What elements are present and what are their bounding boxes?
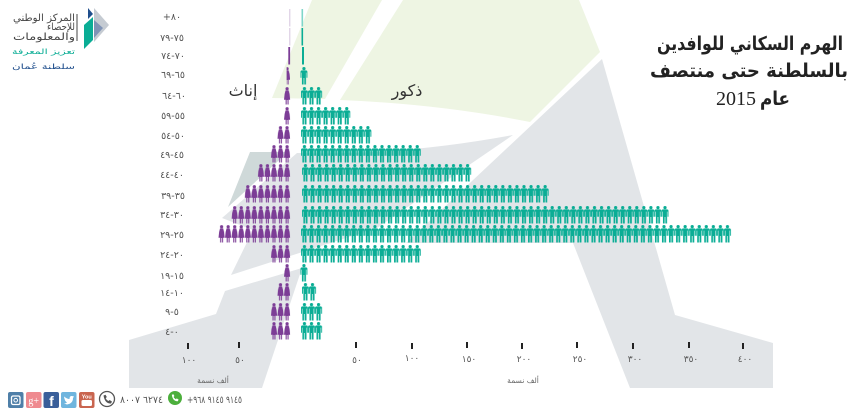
age labels: ٦٥-٦٩ bbox=[161, 70, 185, 81]
age labels: ٤٥-٤٩ bbox=[160, 150, 184, 161]
axis labels: ٥٠ bbox=[235, 356, 245, 366]
axis labels: ٤٠٠ bbox=[738, 355, 752, 365]
age labels: ٠-٤ bbox=[165, 327, 179, 338]
logo tagline: تعزيز المعرفة bbox=[12, 47, 75, 56]
unit label: females: ألف نسمة bbox=[197, 375, 229, 385]
title: عام bbox=[760, 88, 790, 110]
icon: google plus: g+ bbox=[28, 396, 39, 407]
axis labels bbox=[182, 354, 752, 366]
axis labels: ١٠٠ bbox=[182, 356, 196, 366]
age labels: ٣٠-٣٤ bbox=[160, 210, 184, 221]
axis labels: ٣٥٠ bbox=[684, 355, 698, 365]
icon: instagram bbox=[8, 392, 24, 408]
pictogram bars: females bbox=[218, 9, 290, 340]
age labels: ٣٥-٣٩ bbox=[161, 191, 185, 202]
icon: twitter bbox=[61, 392, 76, 408]
logo name: والمعلومات bbox=[13, 32, 75, 43]
axis labels: ١٥٠ bbox=[462, 355, 476, 365]
axis labels: ٢٠٠ bbox=[517, 355, 531, 365]
logo name bbox=[13, 13, 75, 43]
phone number: ٨٠٠٧ ٦٢٧٤ bbox=[120, 395, 163, 406]
logo country: سلطنة عُمان bbox=[12, 62, 75, 71]
age labels bbox=[160, 12, 186, 338]
logo divider bbox=[76, 14, 78, 41]
age labels: ٢٠-٢٤ bbox=[160, 250, 184, 261]
logo mark bbox=[84, 8, 109, 49]
axis ticks bbox=[187, 342, 744, 349]
logo name: المركز الوطني bbox=[13, 13, 75, 24]
age labels: ٤٠-٤٤ bbox=[160, 170, 184, 181]
age labels: ٥٥-٥٩ bbox=[161, 111, 185, 122]
icon: youtube: You bbox=[82, 394, 92, 400]
age labels: ٥٠-٥٤ bbox=[161, 131, 185, 142]
logo bbox=[12, 8, 109, 71]
age labels: ٧٠-٧٤ bbox=[161, 51, 185, 62]
footer: social icons bbox=[8, 392, 94, 409]
icon: facebook: f bbox=[49, 393, 54, 409]
age labels: ٥-٩ bbox=[165, 307, 179, 318]
age labels: ١٥-١٩ bbox=[160, 271, 184, 282]
icon: phone bbox=[100, 392, 114, 406]
age labels: ٧٥-٧٩ bbox=[160, 33, 184, 44]
age labels: ٢٥-٢٩ bbox=[160, 230, 184, 241]
logo name: للإحصاء bbox=[47, 22, 75, 33]
background shapes bbox=[129, 0, 773, 388]
axis labels: ٢٥٠ bbox=[573, 355, 587, 365]
axis labels: ٣٠٠ bbox=[628, 355, 642, 365]
whatsapp number: +٩٦٨ ٩١٤٥ ٩١٤٥ bbox=[187, 395, 242, 406]
age labels: +٨٠ bbox=[163, 12, 181, 23]
label: females: إناث bbox=[229, 81, 257, 100]
title: 2015 bbox=[716, 88, 756, 110]
title: بالسلطنة حتى منتصف bbox=[650, 60, 848, 82]
age labels: ٦٠-٦٤ bbox=[162, 91, 186, 102]
axis labels: ٥٠ bbox=[352, 356, 362, 366]
pictogram bars: males bbox=[300, 9, 731, 340]
icon: whatsapp bbox=[168, 391, 182, 405]
age labels: ١٠-١٤ bbox=[160, 288, 184, 299]
unit label: males: ألف نسمة bbox=[507, 375, 539, 385]
axis labels: ١٠٠ bbox=[405, 354, 419, 364]
title bbox=[650, 33, 848, 110]
label: males: ذكور bbox=[391, 81, 422, 101]
